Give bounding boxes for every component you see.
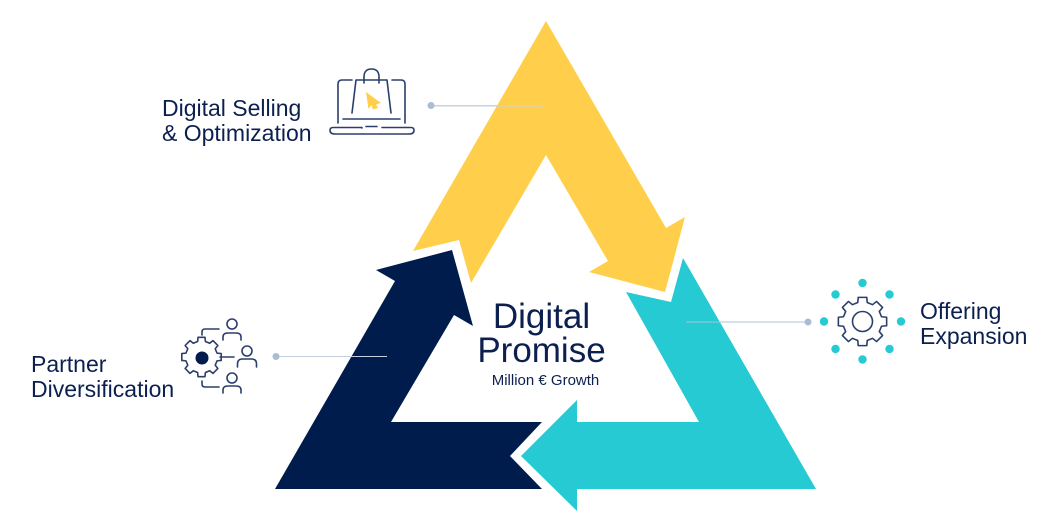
label: Offering Expansion: Offering [920,298,1001,324]
label: Offering Expansion [920,298,1027,349]
center title: Digital Promise: Promise [477,331,606,370]
label: Offering Expansion: Expansion [920,323,1027,349]
label: Partner Diversification: Partner [31,351,106,377]
label: Digital Selling & Optimization: Digital Selling [162,95,301,121]
arrow: yellow digital selling [413,21,685,292]
label: Partner Diversification: Diversification [31,376,174,402]
connector: digital selling [428,102,543,109]
icon: gear with teal dots [820,279,905,364]
center subtitle: Million € Growth: Million € Growth [492,372,599,389]
center title: Digital Promise: Digital [493,297,590,336]
arrow: navy partner diversification [275,250,542,489]
icon: laptop with shopping bag and cursor [330,69,414,134]
center title: Digital Promise [477,297,606,370]
arrow: teal offering expansion [521,258,816,511]
connector: offering expansion [686,318,812,326]
icon: gear with partners [182,319,256,393]
label: Digital Selling & Optimization: & Optimization [162,120,312,146]
connector: partner diversification [272,353,387,360]
label: Digital Selling & Optimization [162,95,312,146]
label: Partner Diversification [31,351,174,402]
